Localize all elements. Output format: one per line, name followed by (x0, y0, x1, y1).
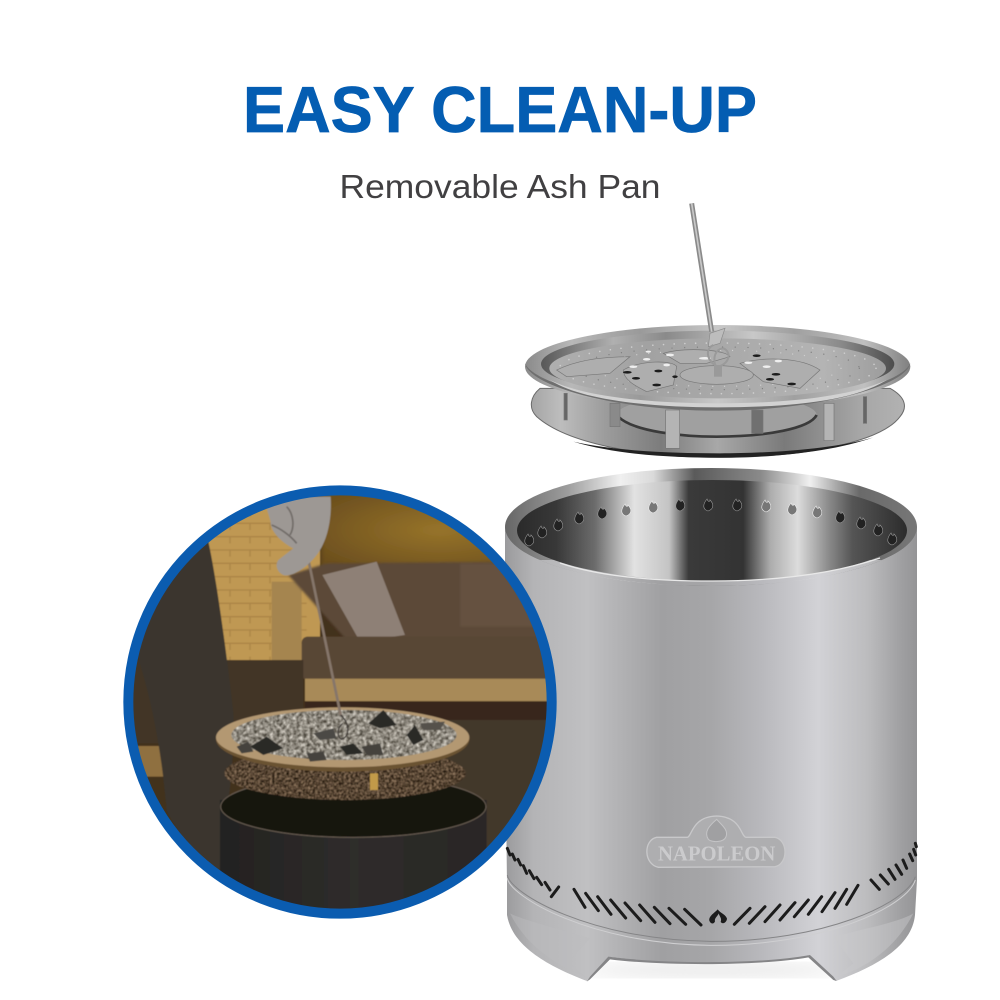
sofa seat (302, 637, 555, 680)
below sofa and floor (305, 701, 546, 720)
ash pan assembly (525, 203, 910, 458)
title: EASY CLEAN-UP (243, 73, 757, 146)
front pan lip (550, 380, 887, 407)
raised centre of disc (617, 394, 817, 436)
foot facets (510, 913, 590, 977)
rod (306, 548, 341, 715)
legs (370, 773, 378, 790)
vent slots, centre left run (574, 889, 701, 925)
blue ring (128, 490, 552, 914)
legs (564, 393, 867, 448)
pillow (322, 562, 405, 642)
rod hook (338, 715, 348, 739)
ash bed (231, 710, 457, 760)
band lines (507, 875, 915, 941)
wicker band (305, 679, 558, 701)
pan (216, 707, 469, 772)
pan floor (549, 338, 886, 398)
centre knob (714, 365, 722, 377)
fire pit body (505, 468, 917, 981)
perforations (559, 343, 876, 394)
background (137, 496, 546, 871)
fire pit (220, 800, 487, 908)
armchair (130, 660, 303, 743)
flame cut-out (709, 909, 727, 923)
base details (507, 816, 916, 982)
person's leg (137, 542, 234, 870)
side wicker (138, 745, 164, 778)
interior of pit (517, 480, 907, 581)
vent slots, centre right run (734, 885, 858, 924)
logo flame (707, 819, 727, 842)
glove (267, 497, 331, 575)
inset photo: ash pan being lifted (120, 480, 560, 927)
subtitle: Removable Ash Pan (340, 168, 660, 205)
cylinder wall (505, 527, 917, 981)
logo badge (647, 816, 785, 867)
soft shadow under pit (582, 963, 842, 977)
brick wall (207, 500, 320, 663)
hook handle (692, 203, 712, 332)
vent slots, left short run (507, 843, 916, 925)
embossed lobes and large holes (557, 350, 820, 392)
vent slots, right short run (871, 843, 916, 889)
inner lip highlight (560, 558, 880, 581)
sofa back cushions (288, 562, 553, 640)
pan well (541, 331, 894, 397)
fire pit opening (220, 785, 487, 838)
lower ash disc (224, 758, 466, 801)
charcoal chunks (237, 710, 445, 762)
logo wordmark: NAPOLEON (658, 841, 776, 865)
flame cut-outs row (525, 499, 897, 546)
lower disc (531, 388, 904, 457)
golden hedge (320, 495, 492, 566)
top rim (505, 468, 917, 586)
upper pan rim (525, 325, 910, 408)
wicker post (272, 582, 302, 662)
